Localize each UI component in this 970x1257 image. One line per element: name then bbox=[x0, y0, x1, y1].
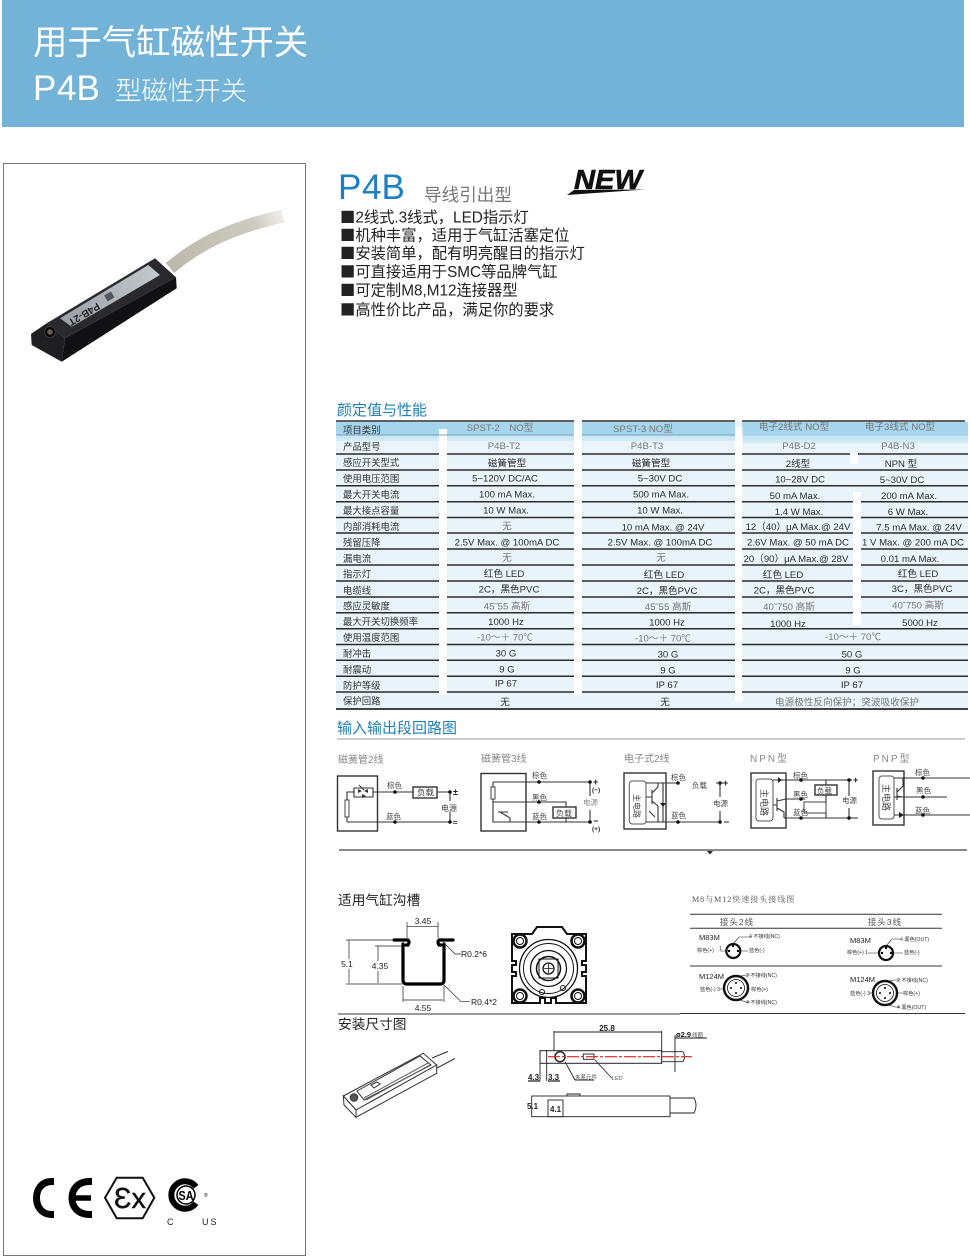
product heading: 导线引出型 bbox=[424, 185, 512, 205]
table: SPST-3 column: 无 bbox=[660, 698, 670, 708]
table: electronic 2-wire column: 10~28V DC bbox=[775, 474, 825, 486]
circuit: electronic 2-wire: 电源 bbox=[713, 798, 728, 808]
circuit: NPN: 蓝色 bbox=[793, 807, 808, 817]
icon: Ex explosion-proof mark bbox=[105, 1178, 154, 1218]
table: electronic 2-wire column: 1000 Hz bbox=[770, 619, 806, 630]
connector: M8 three-wire: M83M bbox=[850, 936, 871, 945]
connector: M8 two-wire: 4 不接线(NC) bbox=[749, 932, 780, 940]
circuit: NPN: 负载 bbox=[817, 786, 832, 796]
circuit: electronic 2-wire: + bbox=[723, 778, 728, 788]
heading: mounting dimensions: 安装尺寸图 bbox=[338, 1017, 406, 1032]
table: SPST-2 column: IP 67 bbox=[495, 678, 517, 690]
circuit: reed 2-wire: 电源 bbox=[441, 803, 457, 813]
circuit: NPN: 主电路 bbox=[759, 789, 770, 816]
connector: M8 three-wire: 4 黑色(OUT) bbox=[900, 935, 929, 943]
table: SPST-2 column: 10 W Max. bbox=[483, 506, 529, 516]
table: SPST-3 column: IP 67 bbox=[656, 680, 678, 691]
diagram: groove cross section: 5.1 bbox=[341, 959, 353, 969]
table: SPST-3 column: 10 W Max. bbox=[637, 506, 683, 516]
circuit: reed 3-wire: 负载 bbox=[556, 808, 572, 818]
table: electronic 2-wire column: 50 mA Max. bbox=[770, 491, 820, 502]
connector: M12 three-wire: 4 黑色(OUT) bbox=[897, 1003, 926, 1011]
table: SPST-3 column: 磁簧管型 bbox=[632, 458, 671, 470]
connector: M8 three-wire bbox=[847, 935, 929, 960]
table: SPST-2 column: 2C，黑色PVC bbox=[479, 584, 539, 596]
table: electronic 2-wire column: P4B-D2 bbox=[782, 441, 816, 452]
circuit: electronic 2-wire: 电子式2线 bbox=[624, 752, 670, 765]
diagram: dimension views: 25.8 bbox=[599, 1024, 615, 1033]
connector wiring panel bbox=[680, 894, 965, 1014]
table: SPST-3 column: SPST-3 NO型 bbox=[613, 423, 673, 435]
connector: M8 three-wire: 蓝色(-) bbox=[904, 948, 920, 956]
table: SPST-2 column bbox=[455, 422, 559, 708]
icon: Ex explosion-proof mark: Ɛx bbox=[114, 1183, 147, 1215]
connector: M8 two-wire bbox=[697, 932, 780, 958]
table: electronic 2-wire column: 40˜750 高斯 bbox=[763, 601, 815, 613]
table: SPST-2 column: SPST-2 NO型 bbox=[467, 422, 534, 434]
table: electronic 3-wire column: 电子3线式 NO型 bbox=[865, 421, 936, 433]
product heading: 4B bbox=[362, 168, 405, 207]
table: SPST-2 column: 1000 Hz bbox=[488, 617, 524, 628]
table: row labels: 最大接点容量 bbox=[343, 505, 399, 516]
circuit: PNP: 主电路 bbox=[881, 784, 892, 811]
panel: product image and certifications bbox=[4, 164, 306, 1256]
circuit: NPN bbox=[750, 752, 858, 828]
table: merged electronic rows: 9 G bbox=[845, 666, 861, 676]
feature list: ■2线式.3线式，LED指示灯 bbox=[340, 206, 529, 228]
table: electronic 3-wire column: 7.5 mA Max. @ 24V bbox=[876, 522, 962, 534]
product heading bbox=[338, 168, 512, 207]
table: electronic 2-wire column bbox=[744, 421, 851, 630]
circuit: reed 3-wire: 棕色 bbox=[532, 770, 547, 780]
table: SPST-2 column: 无 bbox=[502, 522, 512, 532]
table: SPST-3 column bbox=[608, 423, 712, 708]
circuit: reed 3-wire: (−) bbox=[592, 787, 600, 794]
table: SPST-2 column: 5~120V DC/AC bbox=[472, 474, 538, 484]
product photo: P4B magnetic switch: P4B-2T bbox=[66, 300, 101, 327]
feature list bbox=[340, 206, 585, 320]
feature list: ■可直接适用于SMC等品牌气缸 bbox=[340, 260, 558, 282]
table: SPST-2 column: 45˜55 高斯 bbox=[484, 600, 531, 612]
table: electronic 2-wire column: 电子2线式 NO型 bbox=[759, 421, 830, 433]
connector: M12 two-wire: M124M bbox=[699, 972, 724, 981]
table: row labels: 残留压降 bbox=[343, 537, 381, 548]
table: SPST-2 column: 红色 LED bbox=[484, 568, 524, 580]
diagram: dimension views: LED bbox=[612, 1076, 623, 1082]
connector: M12 two-wire: 棕色(+) bbox=[751, 985, 768, 993]
table: merged electronic rows: 电源极性反向保护；突波吸收保护 bbox=[775, 696, 919, 708]
connector: M12 two-wire: 2 不接线(NC) bbox=[746, 971, 777, 979]
table: merged electronic rows: 50 G bbox=[842, 650, 862, 660]
diagram: dimension views: 5.1 bbox=[527, 1102, 539, 1111]
circuit: NPN: + bbox=[853, 775, 858, 785]
diagram: groove cross section: 4.35 bbox=[372, 961, 389, 971]
table: electronic 2-wire column: 2C，黑色PVC bbox=[754, 584, 814, 596]
connector: M8 three-wire: 棕色(+) 1 bbox=[847, 948, 868, 956]
table: SPST-3 column: 9 G bbox=[660, 666, 676, 676]
table: electronic 3-wire column: 红色 LED bbox=[898, 568, 938, 580]
table: row labels: 产品型号 bbox=[343, 441, 381, 452]
table: electronic 2-wire column: 红色 LED bbox=[763, 569, 803, 581]
table: SPST-3 column: P4B-T3 bbox=[631, 441, 663, 452]
circuit: reed 2-wire: 蓝色 bbox=[386, 811, 401, 821]
feature list: ■可定制M8,M12连接器型 bbox=[340, 278, 518, 300]
circuit: PNP: 棕色 bbox=[915, 767, 930, 777]
certification marks bbox=[36, 1178, 219, 1227]
table: row labels: 防护等级 bbox=[343, 680, 381, 691]
connector: M12 three-wire: 蓝色(-) 3 bbox=[850, 989, 870, 997]
icon: CE mark bbox=[36, 1182, 92, 1214]
table: merged electronic rows: IP 67 bbox=[841, 680, 863, 691]
table: row labels: 使用电压范围 bbox=[343, 473, 399, 484]
circuit: reed 2-wire: ≈ bbox=[453, 818, 458, 827]
connector: M12 three-wire: 棕色(+) bbox=[903, 989, 920, 997]
table: row labels: 漏电流 bbox=[343, 553, 372, 564]
table: row labels: 感应开关型式 bbox=[343, 457, 400, 468]
table: row labels: 耐震动 bbox=[343, 664, 371, 675]
circuit: reed 3-wire: 电源 bbox=[583, 797, 598, 807]
table: row labels: 电缆线 bbox=[343, 585, 372, 596]
diagram: dimension views: 4.3 bbox=[528, 1073, 540, 1082]
table: SPST-3 column: 红色 LED bbox=[644, 569, 684, 581]
diagram: groove cross section bbox=[341, 916, 497, 1013]
circuit: reed 2-wire: 磁簧管2线 bbox=[338, 753, 384, 766]
table: electronic 2-wire column: 2.6V Max. @ 50 mA DC bbox=[747, 538, 849, 548]
diagram: groove cross section: 3.45 bbox=[415, 916, 432, 926]
divider above mounting dimensions bbox=[338, 1013, 680, 1015]
table: electronic 3-wire column bbox=[862, 421, 964, 629]
table: SPST-3 column: 无 bbox=[656, 553, 666, 564]
title: main heading: 用于气缸磁性开关 bbox=[33, 24, 308, 62]
circuit: NPN: 电源 bbox=[842, 795, 857, 805]
table: electronic 3-wire column: NPN 型 bbox=[885, 458, 918, 470]
product photo: P4B magnetic switch bbox=[31, 216, 283, 362]
circuit: reed 3-wire: − bbox=[593, 816, 598, 826]
connector: M12 two-wire: 蓝色(-) 3 bbox=[700, 985, 720, 993]
table: SPST-2 column: 磁簧管型 bbox=[488, 458, 527, 470]
icon: CSA mark: US bbox=[202, 1217, 219, 1227]
NEW badge: NEW bbox=[574, 164, 645, 195]
connector: M12 three-wire bbox=[850, 975, 928, 1011]
table: SPST-2 column: 无 bbox=[502, 553, 512, 564]
circuit: PNP: PNP型 bbox=[873, 752, 912, 765]
feature list: ■机种丰富，适用于气缸活塞定位 bbox=[340, 224, 569, 246]
table: electronic 2-wire column: 12（40）μA Max.@ 24V bbox=[746, 521, 851, 533]
table: row labels: 最大开关切换频率 bbox=[343, 616, 418, 627]
circuit: reed 3-wire: (+) bbox=[592, 826, 600, 833]
icon: CSA mark bbox=[167, 1181, 219, 1227]
circuit: electronic 2-wire: 负载 bbox=[692, 780, 707, 790]
table: SPST-3 column: 30 G bbox=[658, 650, 678, 660]
table: SPST-3 column: 5~30V DC bbox=[638, 474, 682, 484]
connector: M8 two-wire: 1 bbox=[719, 946, 722, 952]
connector wiring panel: 接头3线 bbox=[868, 917, 902, 927]
table: row labels: 耐冲击 bbox=[343, 648, 371, 659]
table: row labels: 保护回路 bbox=[343, 696, 381, 706]
connector wiring panel: M8与M12快速接头接线图 bbox=[692, 894, 795, 904]
diagram: dimension views: 线圈 bbox=[692, 1031, 704, 1039]
header banner bbox=[2, 0, 964, 127]
table: SPST-2 column: 30 G bbox=[496, 648, 516, 660]
table: electronic 3-wire column: 5~30V DC bbox=[880, 475, 924, 486]
table: electronic 3-wire column: 0.01 mA Max. bbox=[881, 554, 939, 565]
circuit: electronic 2-wire: 蓝色 bbox=[671, 810, 686, 820]
table: SPST-3 column: 2.5V Max. @ 100mA DC bbox=[608, 538, 712, 548]
circuit: NPN: NPN型 bbox=[750, 752, 789, 765]
table: SPST-3 column: 10 mA Max. @ 24V bbox=[622, 522, 705, 534]
table: SPST-2 column: P4B-T2 bbox=[488, 441, 520, 452]
connector: M12 two-wire: 4 不接线(NC) bbox=[746, 998, 777, 1006]
circuit: PNP: 蓝色 bbox=[915, 805, 930, 815]
table: electronic 2-wire column: 20（90）μA Max.@ 28V bbox=[744, 553, 849, 565]
diagram: dimension views: 4.1 bbox=[550, 1105, 562, 1114]
product heading: P bbox=[338, 168, 361, 207]
connector: M12 three-wire: M124M bbox=[850, 975, 875, 984]
table: SPST-2 column: 100 mA Max. bbox=[479, 490, 535, 500]
table: SPST-3 column: 500 mA Max. bbox=[633, 490, 689, 500]
table: merged electronic rows bbox=[775, 632, 919, 708]
table: electronic 3-wire column: 200 mA Max. bbox=[881, 491, 937, 502]
circuit: reed 3-wire: 蓝色 bbox=[532, 811, 547, 821]
title: model subheading bbox=[33, 69, 247, 108]
icon: CSA mark: ® bbox=[204, 1192, 208, 1199]
diagram: dimension views: ø2.9 bbox=[676, 1030, 691, 1039]
circuit: NPN: − bbox=[853, 813, 858, 823]
table: SPST-3 column: 2C，黑色PVC bbox=[637, 585, 697, 597]
table: electronic 3-wire column: P4B-N3 bbox=[881, 441, 915, 452]
circuit: PNP bbox=[873, 752, 970, 825]
table: electronic 3-wire column: 5000 Hz bbox=[902, 618, 938, 629]
diagram: dimension views: 3.3 bbox=[548, 1073, 560, 1082]
table: row labels bbox=[343, 424, 418, 706]
circuit: electronic 2-wire bbox=[624, 752, 729, 829]
table: row labels: 使用温度范围 bbox=[343, 632, 399, 643]
circuit: reed 3-wire: 黑色 bbox=[532, 792, 547, 802]
table: SPST-2 column: 无 bbox=[500, 698, 510, 708]
circuit: electronic 2-wire: 棕色 bbox=[671, 772, 686, 782]
circuit: NPN: 棕色 bbox=[793, 770, 808, 780]
diagram: groove cross section: R0.4*2 bbox=[471, 997, 497, 1007]
feature list: ■高性价比产品，满足你的要求 bbox=[340, 298, 554, 320]
heading: applicable cylinder groove: 适用气缸沟槽 bbox=[338, 892, 420, 908]
table: electronic 3-wire column: 40˜750 高斯 bbox=[892, 600, 944, 612]
circuit: PNP: 黑色 bbox=[916, 785, 931, 795]
table: SPST-2 column: 2.5V Max. @ 100mA DC bbox=[455, 538, 559, 548]
circuit: reed 2-wire: ± bbox=[453, 787, 458, 797]
circuit: reed 3-wire: 磁簧管3线 bbox=[481, 752, 527, 765]
diagram: isometric switch outline bbox=[343, 1052, 455, 1117]
table: SPST-3 column: 45˜55 高斯 bbox=[645, 601, 692, 613]
table: row labels: 感应灵敏度 bbox=[343, 600, 390, 612]
table: row labels: 指示灯 bbox=[343, 568, 371, 580]
table: row labels: 最大开关电流 bbox=[343, 489, 400, 500]
circuit: reed 2-wire: 负载 bbox=[417, 788, 435, 798]
table: electronic 2-wire column: 1.4 W Max. bbox=[775, 507, 823, 518]
heading: ratings and performance: 颜定值与性能 bbox=[337, 402, 427, 419]
circuit: electronic 2-wire: − bbox=[724, 817, 729, 827]
title: model subheading: 4B bbox=[57, 69, 100, 108]
icon: CSA mark: SA bbox=[178, 1188, 194, 1203]
connector: M8 two-wire: 棕色(+) bbox=[697, 946, 714, 954]
feature list: ■安装简单，配有明亮醒目的指示灯 bbox=[340, 242, 585, 264]
connector: M8 two-wire: M83M bbox=[699, 933, 720, 942]
connector: M8 two-wire: 蓝色(-) bbox=[749, 946, 765, 954]
icon: CSA mark: C bbox=[167, 1217, 174, 1227]
table: SPST-2 column: -10～＋ 70℃ bbox=[477, 632, 533, 644]
connector wiring panel: 接头2线 bbox=[720, 917, 754, 927]
circuit: reed 2-wire bbox=[338, 753, 458, 831]
table: electronic 3-wire column: 3C，黑色PVC bbox=[892, 583, 952, 595]
title: model subheading: P bbox=[33, 69, 56, 108]
table: electronic 3-wire column: 1 V Max. @ 200 mA DC bbox=[862, 538, 964, 548]
table: electronic 2-wire column: 2线型 bbox=[786, 458, 811, 470]
diagram: dimension views: 夹紧元件 bbox=[575, 1073, 598, 1081]
table: SPST-3 column: -10～＋ 70℃ bbox=[635, 634, 691, 644]
circuit: electronic 2-wire: 主电路 bbox=[632, 794, 642, 818]
circuit: NPN: 黑色 bbox=[793, 789, 808, 799]
title: model subheading: 型磁性开关 bbox=[115, 76, 247, 106]
table: SPST-3 column: 1000 Hz bbox=[649, 618, 685, 628]
diagram: dimension views bbox=[527, 1024, 707, 1117]
table: electronic 3-wire column: 6 W Max. bbox=[888, 507, 928, 518]
circuit: reed 2-wire: 棕色 bbox=[387, 780, 402, 790]
table: ratings and performance bbox=[336, 405, 968, 709]
table: SPST-2 column: 9 G bbox=[499, 664, 515, 676]
table: row labels: 内部消耗电流 bbox=[343, 521, 400, 532]
connector: M12 two-wire bbox=[699, 971, 777, 1006]
heading: input output circuit diagrams: 输入输出段回路图 bbox=[337, 720, 457, 737]
circuit: reed 3-wire: + bbox=[593, 777, 598, 787]
diagram: cylinder end view bbox=[512, 927, 586, 1003]
diagram: groove cross section: R0.2*6 bbox=[461, 949, 487, 959]
diagram: groove cross section: 4.55 bbox=[415, 1003, 432, 1013]
circuit: reed 3-wire bbox=[481, 752, 600, 833]
table: merged electronic rows: -10～＋ 70℃ bbox=[825, 632, 881, 643]
table: row labels: 项目类别 bbox=[343, 424, 381, 436]
connector: M12 three-wire: 2 不接线(NC) bbox=[897, 976, 928, 984]
